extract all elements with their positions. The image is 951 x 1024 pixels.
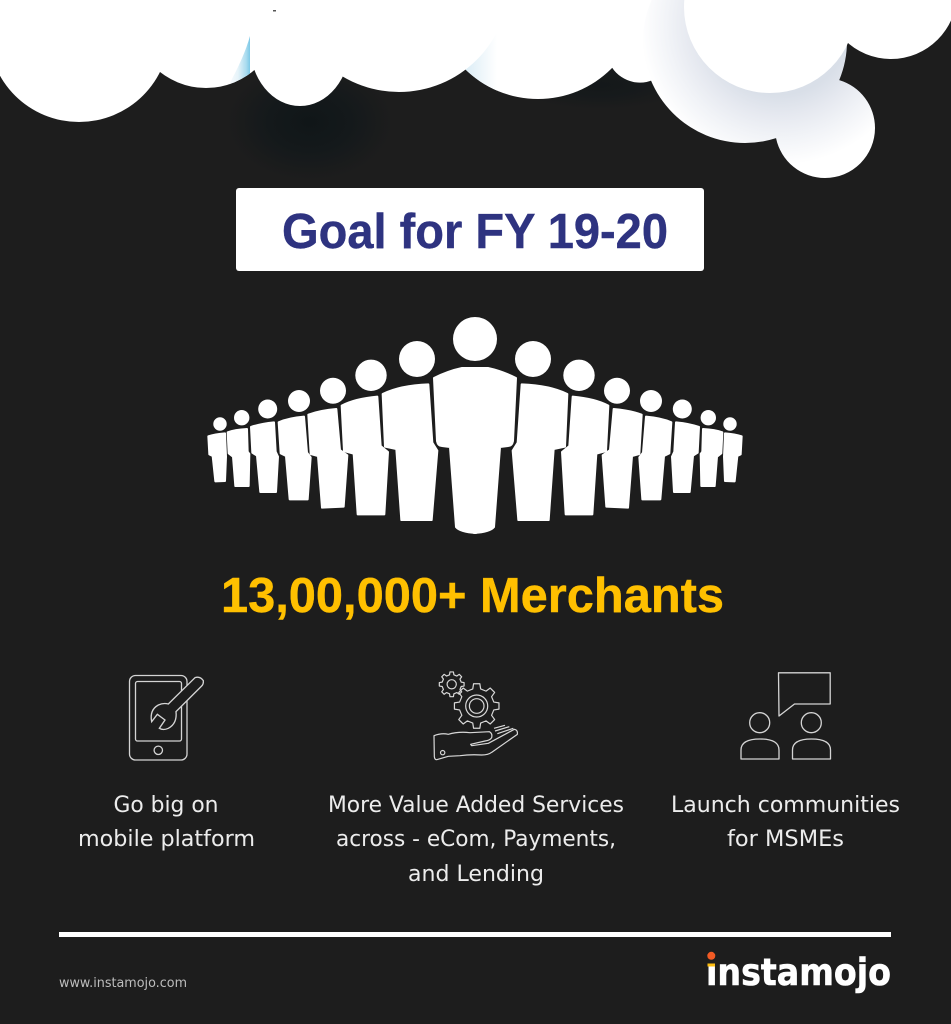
title box xyxy=(236,188,704,271)
text: mobile platform xyxy=(78,793,255,852)
website url: www.instamojo.com xyxy=(59,975,187,991)
icon: gears over hand xyxy=(434,672,517,760)
logo: instamojo: instamojo xyxy=(706,951,891,994)
icon: community chat xyxy=(741,673,830,759)
text: value added services: across - eCom, Payments, xyxy=(336,827,616,852)
clouds xyxy=(0,0,951,180)
footer rule xyxy=(59,932,891,937)
text: value added services: More Value Added Services xyxy=(328,793,624,818)
text: mobile platform: Go big on xyxy=(114,793,218,818)
text: value added services: and Lending xyxy=(408,862,544,887)
text: communities: Launch communities xyxy=(671,793,900,818)
icon: mobile with wrench xyxy=(130,676,203,760)
text: communities xyxy=(671,793,900,852)
cloud shadow xyxy=(228,61,685,180)
text: value added services xyxy=(328,793,624,887)
title: Goal for FY 19-20 xyxy=(282,205,668,259)
text: communities: for MSMEs xyxy=(727,827,844,852)
headline: merchants: 13,00,000+ Merchants xyxy=(221,569,724,623)
crowd of merchants icon xyxy=(208,317,742,533)
text: mobile platform: mobile platform xyxy=(78,827,255,852)
